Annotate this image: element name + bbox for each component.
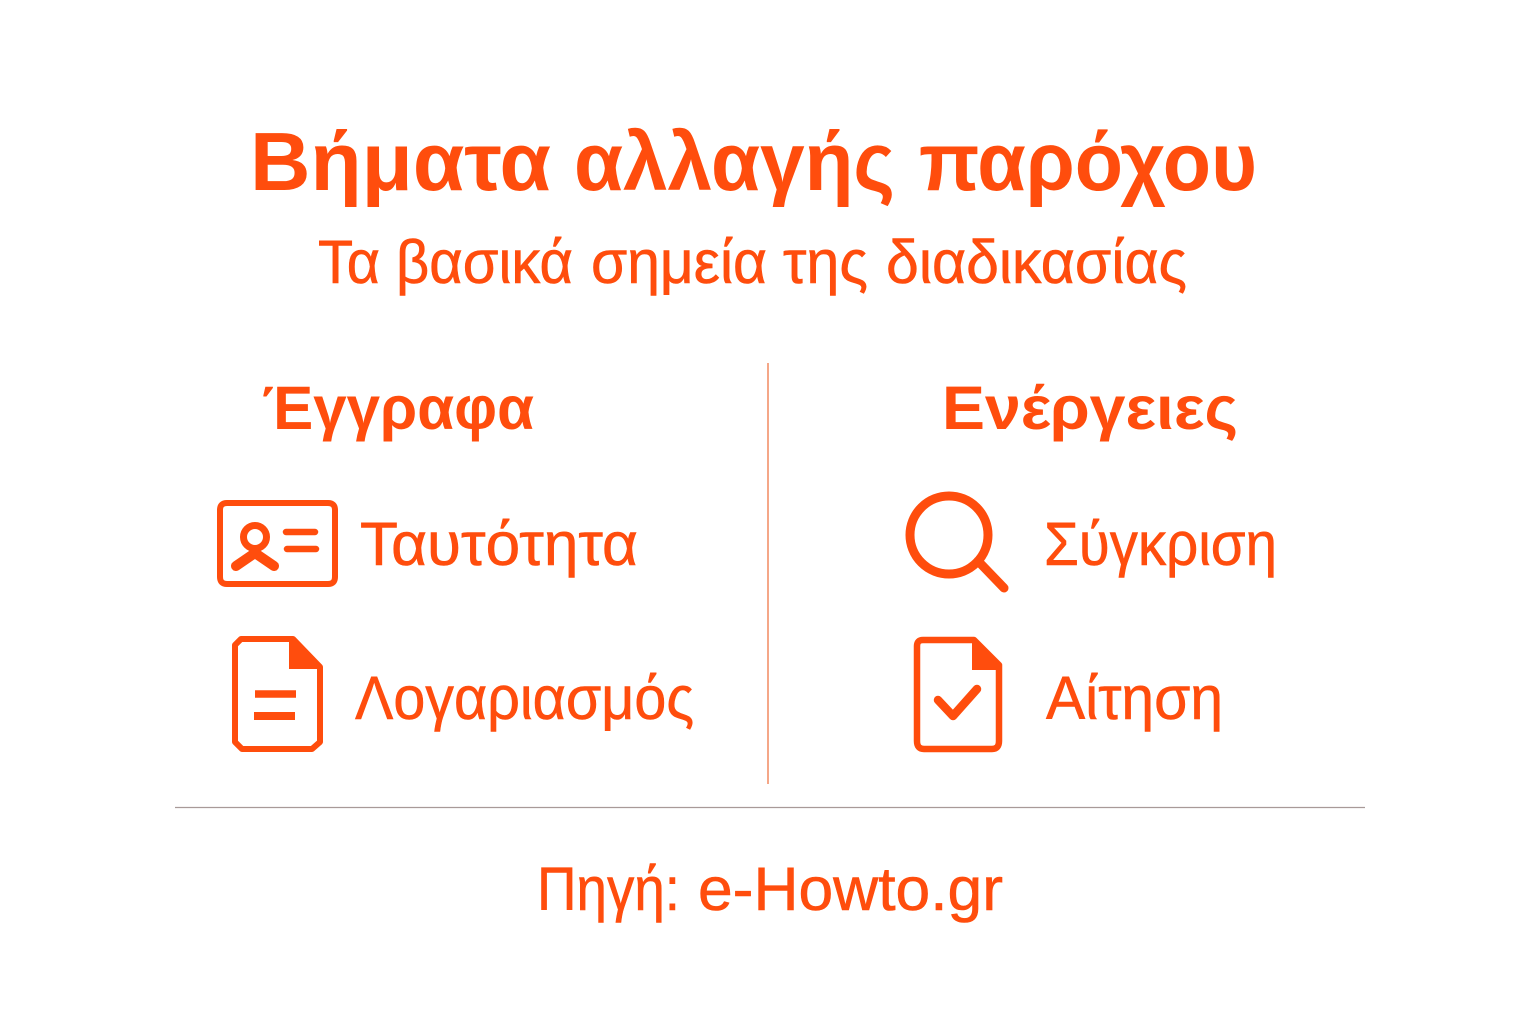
title: αλλαγής [574, 115, 895, 208]
title: παρόχου [919, 115, 1257, 208]
subtitle: της [783, 228, 868, 296]
source [537, 855, 1003, 923]
label: ID: Ταυτότητα [360, 510, 638, 578]
label: comparison: Σύγκριση [1044, 510, 1277, 578]
source: Πηγή: [537, 855, 680, 923]
subtitle [318, 228, 1187, 296]
panel: documents [220, 374, 694, 749]
subtitle: διαδικασίας [886, 228, 1187, 296]
icon: ID card [220, 503, 335, 584]
panel: actions [910, 374, 1277, 749]
source: e-Howto.gr [698, 855, 1003, 923]
heading: documents: Έγγραφα [262, 374, 534, 442]
subtitle: Τα [318, 228, 380, 296]
label: application: Αίτηση [1046, 664, 1223, 732]
title [250, 115, 1257, 208]
icon: magnifier [910, 496, 1004, 588]
heading: actions: Ενέργειες [942, 374, 1238, 442]
label: bill: Λογαριασμός [355, 664, 694, 732]
subtitle: βασικά [396, 228, 573, 296]
subtitle: σημεία [591, 228, 767, 296]
icon: bill document [235, 637, 322, 749]
icon: application document [917, 638, 1002, 749]
title: Βήματα [250, 115, 551, 208]
